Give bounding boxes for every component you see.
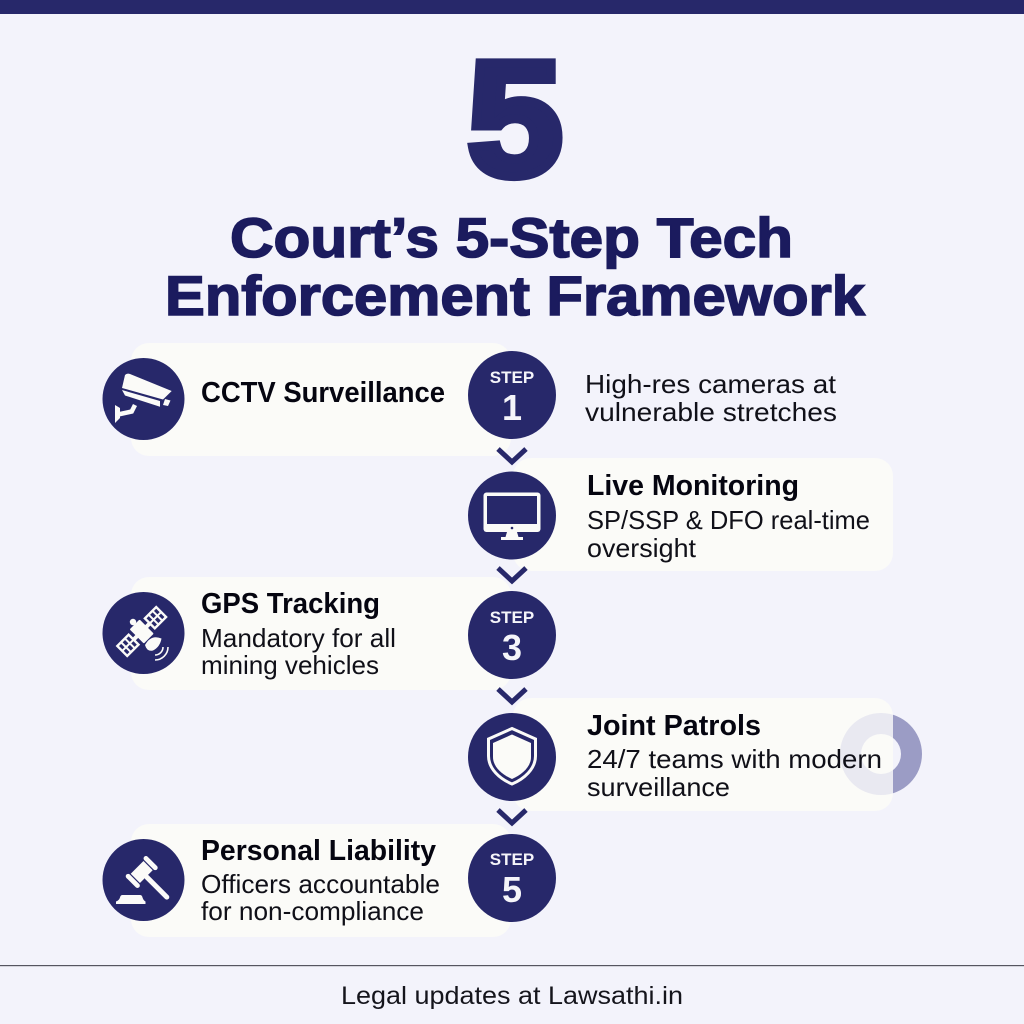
panel: step 1 CCTV — [102, 343, 511, 456]
step 1 description: vulnerable stretches — [585, 397, 837, 427]
icon: CCTV camera — [102, 358, 184, 440]
step node 5: 5 — [502, 869, 522, 910]
description: joint patrols — [587, 744, 882, 802]
step node 1 — [468, 351, 556, 439]
panel: step 2 live monitoring — [513, 458, 893, 571]
step 1 description — [585, 369, 837, 427]
description: live monitoring: SP/SSP & DFO real-time — [587, 505, 870, 535]
description: joint patrols: surveillance — [587, 772, 730, 802]
heading: GPS Tracking: GPS Tracking — [201, 588, 380, 620]
arrow 4 to 5 — [498, 810, 526, 823]
description: live monitoring: oversight — [587, 533, 697, 563]
heading: Live Monitoring: Live Monitoring — [587, 470, 799, 502]
step node 5: STEP — [490, 850, 534, 869]
arrow 1 to 2 — [498, 449, 526, 462]
panel: step 4 joint patrols — [587, 713, 922, 796]
step node 3: STEP — [490, 608, 534, 627]
footer text: Legal updates at Lawsathi.in — [341, 982, 683, 1010]
step node 4: shield icon — [468, 713, 556, 801]
panel: step 3 GPS — [102, 577, 511, 690]
title: Enforcement Framework — [165, 264, 866, 327]
description: personal liability — [201, 869, 440, 926]
step node 3: 3 — [502, 627, 522, 668]
description: GPS: Mandatory for all — [201, 623, 396, 653]
step 1 description: High-res cameras at — [585, 369, 837, 399]
heading: Personal Liability: Personal Liability — [201, 835, 436, 867]
step node 2: monitor icon — [468, 472, 556, 560]
step node 5 — [468, 834, 556, 922]
arrow 3 to 4 — [498, 689, 526, 702]
description: joint patrols: 24/7 teams with modern — [587, 744, 882, 774]
footer divider — [0, 965, 1024, 966]
description: personal liability: for non-compliance — [201, 896, 424, 926]
description: live monitoring — [587, 505, 870, 563]
description: GPS: mining vehicles — [201, 650, 379, 680]
description: GPS — [201, 623, 396, 680]
step node 1: 1 — [502, 387, 522, 428]
title: Court’s 5-Step Tech — [230, 206, 793, 269]
top bar — [0, 0, 1024, 14]
icon: gavel — [102, 839, 184, 921]
step node 3 — [468, 591, 556, 679]
heading: CCTV Surveillance: CCTV Surveillance — [201, 377, 445, 409]
arrow 2 to 3 — [498, 568, 526, 581]
big number 5: 5 — [467, 29, 563, 210]
heading: Joint Patrols: Joint Patrols — [587, 710, 761, 742]
description: personal liability: Officers accountable — [201, 869, 440, 899]
decorative ring — [840, 713, 922, 795]
title — [165, 206, 866, 327]
panel: step 5 personal liability — [102, 824, 511, 937]
icon: satellite — [102, 592, 184, 674]
step node 1: STEP — [490, 368, 534, 387]
